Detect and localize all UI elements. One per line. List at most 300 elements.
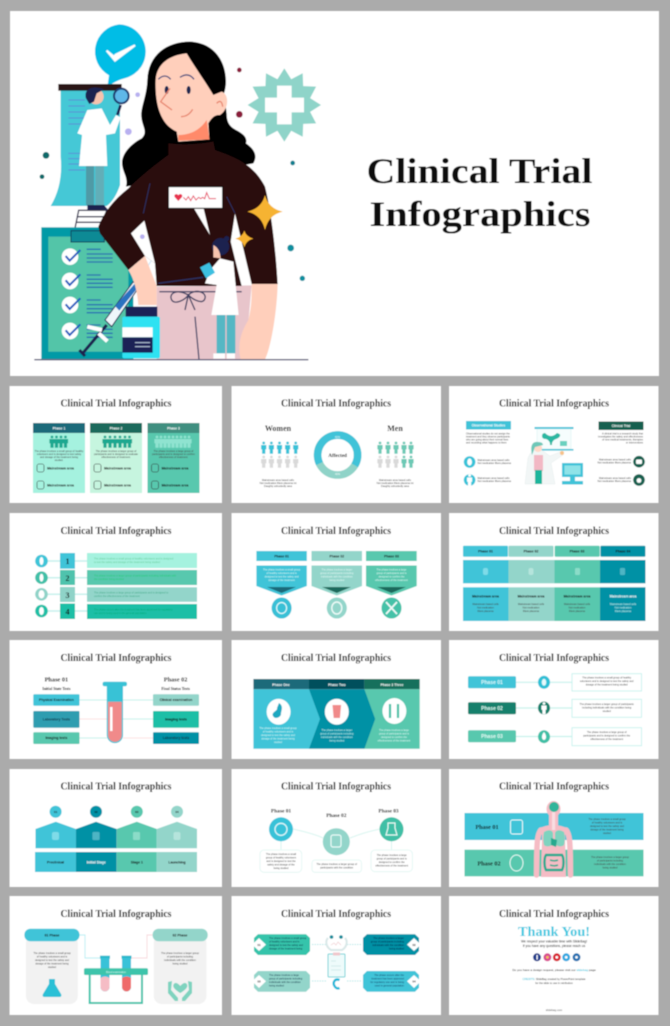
stage 02 (76, 806, 117, 872)
phase 2 column: Mainstream area (104, 484, 131, 488)
phase 3 column: The phase involves a large group of (154, 450, 194, 453)
column 4: filters placema (615, 610, 632, 613)
phase 02 band: being studied (603, 866, 618, 870)
doctor with presentation board (525, 427, 583, 484)
row 3 (35, 587, 197, 602)
box 03: The phase involves a large (269, 974, 299, 977)
phase 03: Phase 03 (378, 808, 399, 814)
phase 01 band: studied (603, 832, 612, 835)
box 02: group of participants including (371, 940, 405, 944)
illustration: clinical trial scene (34, 24, 321, 360)
box 04: treatment has been approved (371, 978, 405, 980)
medicine jar (122, 307, 160, 358)
phase 01 band: The phase involves a small group (588, 818, 626, 821)
row 4: 4 (66, 608, 70, 616)
message: If you have any questions, please reach us (523, 944, 586, 948)
box 02: individuals with the condition (372, 944, 405, 947)
column 3: Mainstream based cells (564, 603, 591, 606)
phase 02 band: The phase involves a larger group (591, 856, 630, 859)
phase 01 band: designed to test the safety and (590, 825, 625, 828)
column 1 (463, 546, 508, 621)
phase 01: The phase involves a small (266, 853, 297, 856)
phase 2 column: The phase involves a larger group of (96, 450, 137, 453)
icon: gold sparkles (235, 195, 283, 247)
stage 03 (117, 806, 157, 872)
column 3: filters placema (569, 610, 586, 613)
phase 01 band: Phase 01 (475, 824, 499, 831)
slide title: Clinical Trial Infographics (60, 526, 172, 537)
column 2: Phase 02 (524, 550, 538, 554)
header row: Phase One (272, 683, 290, 687)
column 4 (600, 546, 646, 621)
phase 01 row: The phase involves a small group of healthy (582, 676, 632, 680)
phase 02 list: Final Status Tests (161, 687, 190, 691)
phase card 2: being studied (173, 962, 188, 966)
column 1: Mainstream area (472, 594, 499, 598)
slide title: Clinical Trial Infographics (499, 909, 609, 920)
slide title: Clinical Trial Infographics (499, 398, 609, 410)
panel: slide 8 chevron phases (232, 640, 441, 759)
slide title: Clinical Trial Infographics (499, 653, 609, 664)
row 1 (35, 553, 197, 569)
row 4: The phase occurs after the treatment has been approved for regulatory (94, 608, 173, 612)
row 3: 3 (66, 591, 70, 600)
phase 01: of healthy volunteers and is (266, 572, 298, 575)
phase 2 column: participants and is designed to evaluate (94, 453, 139, 456)
stage 01: 01 (54, 810, 58, 814)
woman: arms (128, 256, 278, 359)
column 3: Mainstream area (564, 594, 590, 598)
books (75, 210, 107, 228)
phase 01 band (464, 813, 644, 840)
phase card 2: The phase involves a larger group (161, 952, 200, 955)
phase 3 column: Mainstream area (162, 484, 188, 488)
panel: slide 7 test tube (10, 640, 222, 759)
men group: Not medication filters placema int (377, 482, 414, 485)
stage 04: Launching (168, 860, 186, 864)
box 01: The phase involves a small group (269, 937, 307, 940)
credits: CREDITS: SlideBag created by PowerPoint template (523, 977, 586, 981)
slide title: Clinical Trial Infographics (281, 526, 391, 537)
slide title: Clinical Trial Infographics (60, 782, 172, 792)
phase 02 list: Phase 02 (164, 676, 187, 684)
right column (598, 422, 645, 486)
phase 02 list: Clinical examination (160, 698, 192, 702)
hero title (366, 151, 592, 234)
stage 03: Stage 1 (131, 860, 143, 864)
panel: slide 12 body anatomy (449, 769, 658, 887)
phase 02: being studied (329, 579, 345, 582)
row 2: the condition being studied (94, 578, 124, 581)
connectors (281, 829, 392, 850)
column 4: Mainstream area (610, 594, 636, 598)
box 03: 03 (257, 980, 261, 984)
right column: investigates the safety and effectiveness (598, 436, 644, 438)
chevron 3 (364, 689, 420, 749)
women group: Daughly unburdedly area (264, 485, 293, 488)
test tube rack (84, 956, 148, 1003)
panel: slide 6 phase table (449, 513, 658, 631)
phase 02 row: including individuals with the condition being (582, 706, 632, 710)
column 2: filters placema (523, 610, 540, 613)
phase 02: Phase 02 (329, 554, 344, 558)
column 4: Not medication (615, 606, 632, 610)
phase 01 list: Imaging tests (45, 736, 67, 740)
phase 1 column: and dosage of the treatment being (40, 456, 79, 459)
credits: for the slide to use in retribution (535, 981, 573, 985)
small nurse (200, 236, 239, 359)
right column: Mainstream area based cells (599, 458, 632, 462)
column 1: filters placema (477, 610, 494, 613)
chevron 1: of healthy volunteers and is (263, 730, 294, 734)
phase 02 band: of participants including (597, 860, 624, 862)
stethoscope and clipboard (326, 935, 347, 988)
poster scroll (51, 84, 122, 206)
phase 02 row (468, 699, 642, 717)
column 3: Not medication (569, 606, 586, 610)
row 1: 1 (66, 557, 70, 566)
arrows (312, 944, 361, 981)
right column: of new medical treatments, therapies (602, 438, 644, 442)
phase 3 column (148, 423, 200, 493)
stage 03: 03 (135, 810, 139, 814)
phase 01: safety and dosage of the (267, 864, 295, 866)
message (521, 940, 587, 948)
chevron 3: group of participants and is (379, 732, 410, 736)
phase 01 band: dosage of the treatment being (590, 828, 624, 832)
row 2 (35, 570, 197, 585)
header row: Phase 3 Three (380, 683, 404, 687)
box 01: 01 (257, 943, 261, 947)
header row: Phase Two (328, 683, 346, 687)
women group: Women (265, 424, 292, 433)
chevron 1: designed to test the safety and (261, 734, 296, 737)
column 1: Mainstream based cells (472, 603, 499, 606)
box 01 (252, 934, 310, 955)
header row (253, 679, 420, 689)
box 03: being studied (269, 984, 284, 988)
row 1: to test the safety and dosage of the treatment being studied (94, 561, 160, 564)
women group: Not medication filters placema int (260, 482, 297, 485)
men group: Mainstream area based cells (379, 479, 412, 482)
phase 02 (312, 813, 362, 872)
phase 02 row: Phase 02 (481, 706, 503, 712)
phase 01: and is designed to test the (266, 860, 296, 863)
hero title: Clinical Trial (366, 151, 592, 191)
box 02 (363, 934, 421, 955)
phase 01: dosage of the treatment (268, 579, 295, 582)
column 3 (554, 546, 600, 621)
decorative dots (40, 68, 305, 281)
row 2: The phase involves a larger group of participants including individuals with (94, 574, 177, 578)
slide title: Clinical Trial Infographics (499, 526, 609, 537)
phase 01: group of healthy volunteers (266, 856, 297, 860)
chevron 3: designed to confirm the (381, 736, 408, 739)
panel: slide 2 women and men donut (232, 386, 441, 503)
phase 02: group of participants including (320, 572, 354, 575)
phase 1 column: studied. (55, 459, 64, 462)
column 1: Not medication (477, 606, 494, 610)
box 04: 04 (412, 980, 416, 984)
men group: Daughly unburdedly area (381, 485, 410, 488)
phase 3 column: Mainstream area (162, 466, 188, 470)
slide title: Clinical Trial Infographics (281, 398, 391, 410)
phase 03 (371, 808, 412, 872)
donut chart: Affected (328, 453, 347, 459)
left column: Observational studies do not assign the (466, 432, 510, 436)
phase 03: The phase involves a large (377, 568, 407, 572)
thank you heading: Thank You! (518, 925, 590, 940)
phase 02: individuals with the condition (321, 576, 353, 578)
box 03 (252, 971, 310, 992)
phase 01 row: dosage of the treatment being studied (586, 684, 628, 686)
box 01: designed to test the safety and (269, 944, 304, 947)
phase 1 column: Phase 1 (53, 426, 66, 430)
box 01: of healthy volunteers and is (269, 940, 300, 944)
slide title: Clinical Trial Infographics (499, 782, 609, 792)
women group: Mainstream area based cells (262, 479, 295, 482)
phase 03 row: participants and is designed to confirm the (583, 734, 631, 738)
phase 03: The phase involves a large (377, 854, 407, 857)
phase 01: designed to test the safety and (265, 576, 299, 578)
ground line (34, 359, 308, 360)
panel: slide 9 phase connectors (449, 640, 658, 759)
right column: Clinical Trial (612, 424, 631, 428)
phase 3 column: Phase 3 (167, 426, 180, 430)
panel: slide 15 thank you (449, 896, 658, 1015)
phase card 2: individuals with the condition (164, 959, 196, 962)
column 2: Mainstream area (518, 594, 544, 598)
slide title: Clinical Trial Infographics (281, 653, 391, 664)
panel: hero slide (10, 11, 659, 376)
message: We respect your valuable time with SlideBag! (521, 940, 587, 944)
box 02: being studied (389, 948, 405, 950)
box 03: group of participants including (269, 978, 303, 980)
credits (523, 977, 586, 985)
box 04 (363, 971, 421, 992)
phase 03 (366, 551, 417, 618)
phase 02 row: The phase involves a larger group of participants (580, 703, 634, 706)
icon: medical cross badge (248, 68, 321, 142)
panel: slide 14 clipboard and stethoscope (232, 896, 441, 1015)
box 04: The phase occurs after the (374, 974, 405, 977)
donut chart: 40% (335, 472, 341, 476)
phase 01 list (33, 676, 80, 744)
phase 03: effectiveness of the treatment (375, 864, 408, 868)
row 3: confirm the effectiveness of the treatment (94, 595, 140, 598)
left column: and recording what happens to them (466, 442, 507, 444)
donut chart: 60% (335, 435, 341, 439)
hero title: Infographics (370, 194, 590, 234)
left column: Mainstream area based cells (478, 477, 510, 480)
phase 02 list (153, 676, 199, 744)
column 4: Phase 04 (616, 550, 630, 554)
phase 1 column: Mainstream area (47, 484, 74, 488)
phase 03 row: The phase involves a large group of (587, 731, 627, 734)
phase 03 row (468, 728, 642, 746)
connector lines (80, 700, 153, 738)
panel: slide 11 three phase circles (232, 769, 441, 887)
phase 01 list: Phase 01 (45, 676, 68, 684)
phase 02: The phase involves a larger (321, 568, 352, 572)
phase 01: The phase involves a small group (263, 568, 301, 572)
phase card 2: 02 Phase (173, 934, 187, 938)
right column: or interventions (626, 442, 644, 444)
stage 02: Initial Stage (87, 860, 106, 864)
row 4 (35, 604, 197, 619)
column 1: Phase 01 (478, 550, 493, 554)
panel: slide 4 numbered rows (10, 513, 222, 631)
phase 01 band: of healthy volunteers and is (592, 822, 623, 824)
row 3: The phase involves a large group of participants and is designed to (94, 592, 169, 594)
right column: Not medication filters placema (598, 462, 632, 464)
phase card 2 (153, 929, 208, 1004)
chevron 2 (309, 689, 375, 749)
phase 03: Phase 03 (384, 554, 399, 558)
slide title: Clinical Trial Infographics (281, 909, 391, 920)
phase card 1 (24, 929, 79, 1004)
phase 03: effectiveness of the treatment (375, 579, 408, 582)
men group (377, 424, 414, 488)
phase 02 band: Phase 02 (477, 860, 501, 868)
phase 02 list: Imaging tests (165, 718, 187, 722)
woman: pants (157, 285, 252, 359)
box 02: 02 (412, 943, 416, 947)
woman: sweater (98, 142, 278, 286)
panel: slide 5 phase arrows (232, 513, 441, 631)
phase 1 column (33, 423, 85, 493)
phase 03: group of participants and is (376, 572, 407, 575)
woman: hair (122, 42, 255, 187)
row 4: use and is being used in the general population (94, 612, 147, 615)
box 01: dosage of the treatment being (269, 948, 303, 950)
stage 02: 02 (94, 810, 98, 814)
phase 03: group of participants and is (377, 858, 407, 860)
phase 02 band (464, 850, 644, 876)
social icons (533, 953, 580, 961)
column 2 (508, 546, 554, 621)
column 2: Mainstream based cells (518, 603, 545, 606)
left column: Mainstream area based cells (478, 459, 510, 462)
phase 02 list: Laboratory tests (163, 736, 189, 740)
column 4: Mainstream based cells (610, 603, 637, 606)
phase 1 column: Mainstream area (47, 466, 74, 470)
phase 2 column: effectiveness of treatment. (101, 456, 131, 459)
row 1: The phase involves a small group of healthy volunteers and is designed (94, 558, 174, 560)
slide title: Clinical Trial Infographics (60, 909, 172, 920)
chevron 1: The phase involves a small group (259, 727, 297, 730)
box 02: The phase involves a larger (373, 937, 404, 940)
test tube (103, 682, 127, 743)
phase 3 column: participants and is designed to confirm (152, 453, 195, 456)
row 2: 2 (66, 574, 70, 583)
phase card 1: The phase involves a small group (33, 952, 71, 955)
right column: Mainstream area based cells (599, 477, 632, 480)
stage 01: Preclinical (47, 860, 64, 864)
phase 02 band: individuals with the condition (594, 863, 626, 866)
box 03: individuals with the condition (269, 981, 301, 984)
stage 04: 04 (175, 810, 179, 814)
doctor with magnifier (77, 87, 129, 210)
phase 02: Phase 02 (326, 813, 347, 819)
chevron 2: individuals with the condition (321, 736, 353, 739)
box 04: used in general population (375, 984, 405, 988)
chevron 2: group of participants including (320, 732, 354, 736)
chevron 2: being studied (329, 740, 345, 742)
stage 01 (35, 806, 76, 872)
phase 02 row: studied (603, 710, 611, 713)
right column: Not medication filters placema (598, 480, 632, 483)
phase 3 column: effectiveness of treatment. (159, 456, 188, 459)
phase 1 column: volunteers and is designed to test safety (37, 453, 82, 456)
phase card 2: of participants including (167, 956, 194, 958)
chevron 1 (253, 689, 320, 749)
column 2: Not medication (523, 606, 540, 610)
column 3: Phase 03 (570, 550, 584, 554)
phase 01 (256, 551, 307, 618)
chevron 1: dosage of the treatment being (261, 738, 295, 740)
connector lines (516, 682, 572, 736)
phase 01: Phase 01 (274, 554, 289, 558)
phase 01 list: Initial State Tests (42, 687, 71, 691)
woman: face (156, 53, 227, 142)
slide title: Clinical Trial Infographics (60, 398, 172, 410)
left column: Not medication filters placema (478, 480, 512, 483)
panel: slide 1 three phases (10, 386, 222, 503)
phase 01: being studied (274, 867, 289, 870)
request line: Do you have a design request, please visit our slidebag page (512, 968, 596, 972)
chevron 2: The phase involves a larger (321, 729, 352, 732)
phase card 1: studied (48, 966, 57, 969)
phase 1 column: The phase involves a small group of healthy (35, 450, 84, 453)
phase 03: designed to confirm the (379, 861, 405, 864)
phase 03 row: effectiveness of the treatment (590, 738, 623, 741)
chevron 1: studied (274, 741, 283, 744)
phase card 1: 01 Phase (45, 934, 59, 938)
phase 01 (260, 808, 302, 872)
phase 01 row: volunteers and is designed to test the safety and (580, 680, 634, 683)
phase 01 list: Laboratory Tests (43, 718, 70, 722)
slide title: Clinical Trial Infographics (60, 653, 172, 664)
phase card 1: of healthy volunteers and is (37, 956, 68, 958)
donut chart (318, 435, 358, 476)
phase 01 row (468, 674, 642, 691)
chevron 3: The phase involves a large (379, 729, 410, 732)
phase 02: participants with the condition (320, 866, 354, 870)
phase 2 column: Mainstream area (104, 466, 131, 470)
stage 04 (157, 806, 197, 872)
phase 01 list: Physical Examination (39, 698, 74, 702)
chevron 3: effectiveness of the treatment (378, 740, 411, 742)
test tube rack: Blood examination (106, 971, 127, 974)
left column: treatment and they observe participants (466, 436, 511, 438)
heart-rate badge (168, 187, 223, 235)
connector lines (80, 935, 105, 958)
phase 2 column (90, 423, 142, 493)
phase card 1: dosage of the treatment being (35, 962, 69, 966)
phase card 1: designed to test the safety and (35, 959, 70, 962)
phase 01 row: Phase 01 (481, 680, 503, 686)
icon: speech bubble check (95, 24, 146, 87)
right column: A clinical trial is a research study that (602, 432, 643, 436)
left column: Observational Studies (472, 424, 506, 428)
human body anatomy (536, 801, 570, 877)
men group: Men (387, 424, 403, 433)
phase 2 column: Phase 2 (110, 426, 123, 430)
footer link: slidebag.com (546, 1008, 563, 1012)
phase 02: The phase involves a larger group of (316, 863, 357, 866)
phase 01: Phase 01 (271, 808, 291, 814)
